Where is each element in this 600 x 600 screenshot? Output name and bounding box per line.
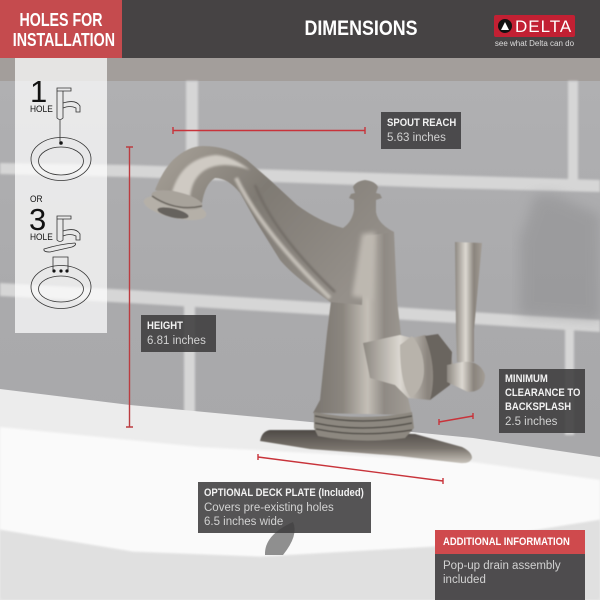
callout: optional deck plate <box>198 482 371 533</box>
callout: optional deck plate: Covers pre-existing holes <box>204 502 334 514</box>
logo: delta: DELTA <box>515 17 572 36</box>
logo: delta: see what Delta can do <box>495 39 574 48</box>
text: drain assembly <box>443 560 561 586</box>
header bar <box>122 0 600 58</box>
callout: minimum clearance to backsplash <box>499 369 585 433</box>
callout: minimum clearance to backsplash: 2.5 inches <box>505 416 557 428</box>
callout: optional deck plate: OPTIONAL DECK PLATE (Included) <box>204 487 364 499</box>
callout: height: 6.81 inches <box>147 335 206 347</box>
callout: spout reach: SPOUT REACH <box>387 117 456 129</box>
title: dimensions: DIMENSIONS <box>304 17 418 40</box>
callout: height <box>141 315 216 352</box>
heading: holes for installation: HOLES FOR <box>20 10 102 30</box>
heading: additional information <box>435 530 585 554</box>
text: drain assembly: included <box>443 574 486 586</box>
callout: spout reach <box>381 112 461 149</box>
numeral: 3: 3 <box>29 202 46 237</box>
nozzle <box>142 191 208 225</box>
label: hole: HOLE <box>30 104 53 115</box>
label: or: OR <box>30 194 43 205</box>
numeral: 1: 1 <box>30 74 47 109</box>
panel: holes for installation diagrams <box>15 58 107 333</box>
heading: additional information: ADDITIONAL INFORMATION <box>443 536 570 548</box>
heading: holes for installation <box>0 0 122 58</box>
label: hole: HOLE <box>30 232 53 243</box>
icon: faucet and sink diagrams <box>30 88 92 309</box>
callout: height: HEIGHT <box>147 320 183 332</box>
text: drain assembly: Pop-up drain assembly <box>443 560 561 572</box>
callout: minimum clearance to backsplash: BACKSPLASH <box>505 401 571 413</box>
panel: additional information <box>435 530 585 600</box>
heading: holes for installation: INSTALLATION <box>13 30 115 50</box>
logo: delta <box>494 15 575 48</box>
callout: minimum clearance to backsplash: MINIMUM <box>505 373 548 385</box>
callout: optional deck plate: 6.5 inches wide <box>204 516 283 528</box>
callout: minimum clearance to backsplash: CLEARANCE TO <box>505 387 580 399</box>
callout: spout reach: 5.63 inches <box>387 132 446 144</box>
